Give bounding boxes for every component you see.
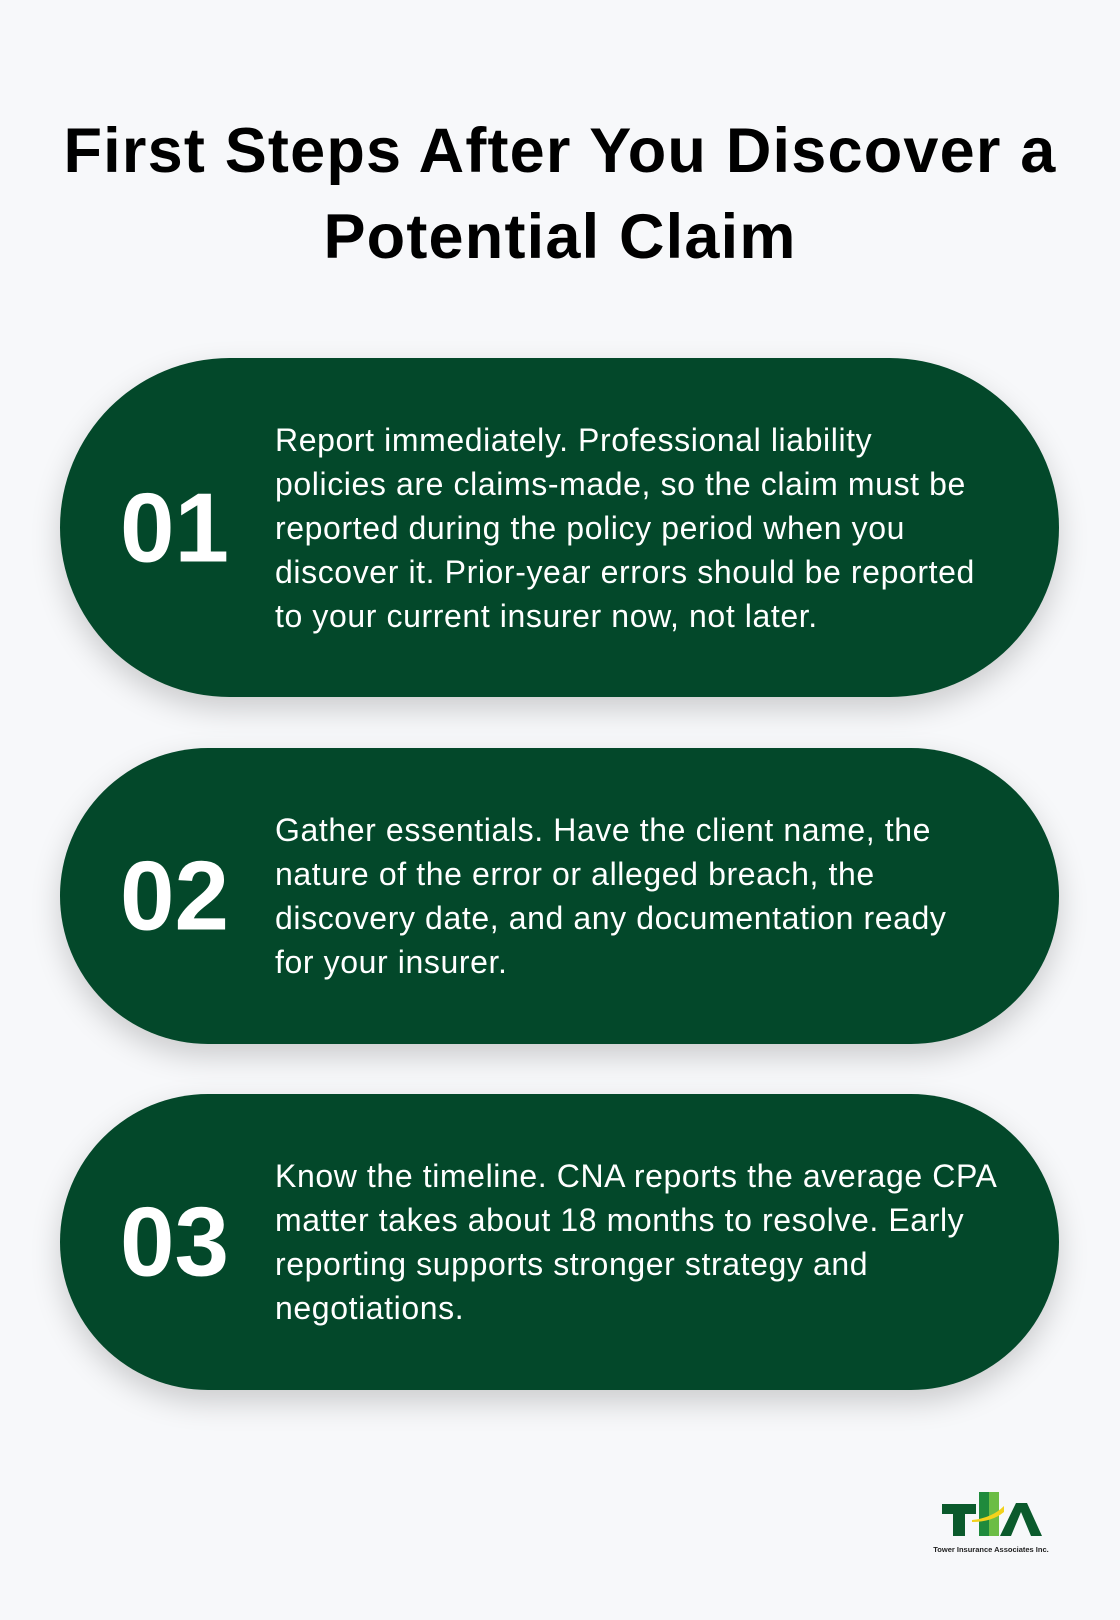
panel: step 02 (60, 748, 1059, 1044)
text: step 02: for your insurer. (275, 944, 508, 980)
panel: step 01 (60, 358, 1059, 697)
text: step 03: Know the timeline. CNA reports the average CPA (275, 1158, 997, 1194)
logo (933, 1492, 1049, 1554)
text: step 01: discover it. Prior-year errors should be reported (275, 554, 975, 590)
text: step 03: reporting supports stronger strategy and (275, 1246, 868, 1282)
number 02: 02 (120, 840, 229, 950)
logo: Tower Insurance Associates Inc. (933, 1545, 1049, 1554)
text: step 02: discovery date, and any documentation ready (275, 900, 947, 936)
number 01: 01 (120, 472, 229, 582)
title: First Steps After You Discover a (63, 116, 1057, 186)
text: step 01: to your current insurer now, not later. (275, 598, 818, 634)
text: step 02: Gather essentials. Have the client name, the (275, 812, 931, 848)
text: step 02 (275, 812, 947, 980)
text: step 03 (275, 1158, 997, 1326)
text: step 01 (275, 422, 975, 634)
text: step 02: nature of the error or alleged breach, the (275, 856, 875, 892)
number 03: 03 (120, 1186, 229, 1296)
text: step 03: matter takes about 18 months to resolve. Early (275, 1202, 964, 1238)
text: step 01: policies are claims-made, so the claim must be (275, 466, 966, 502)
panel: step 03 (60, 1094, 1059, 1390)
text: step 03: negotiations. (275, 1290, 464, 1326)
text: step 01: Report immediately. Professional liability (275, 422, 872, 458)
title (63, 116, 1057, 272)
title: Potential Claim (323, 202, 797, 272)
text: step 01: reported during the policy period when you (275, 510, 905, 546)
